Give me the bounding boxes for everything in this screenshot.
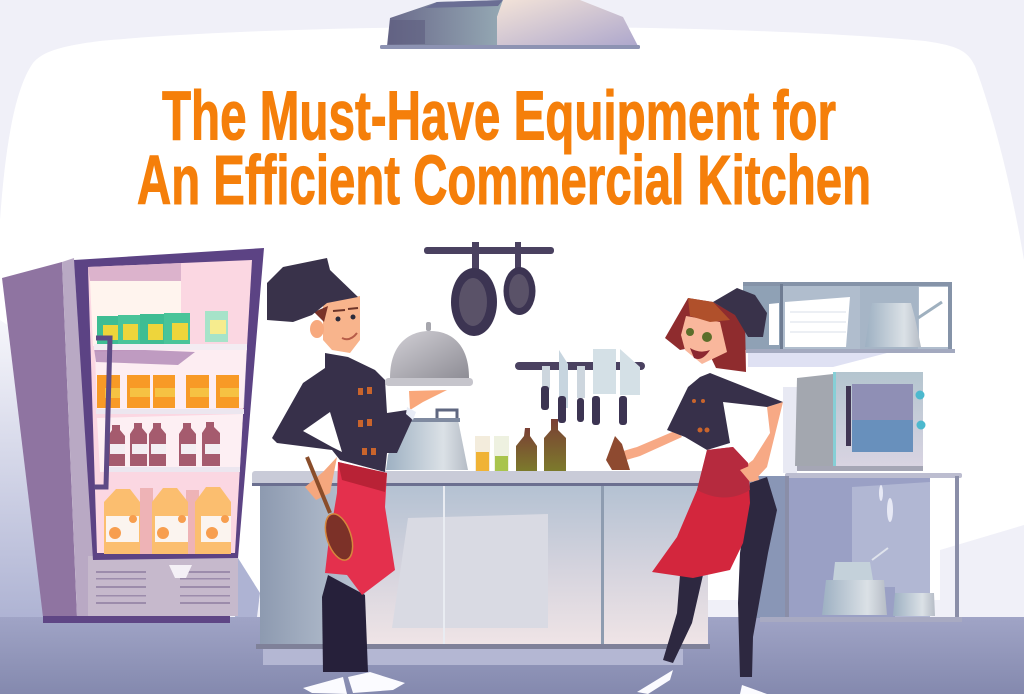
pot on shelf — [865, 303, 921, 347]
woman back leg — [738, 477, 777, 677]
pepper grinder — [606, 436, 630, 470]
woman torso — [667, 373, 783, 450]
fridge body base — [88, 556, 238, 616]
shelf 1 cans — [97, 311, 228, 347]
fridge door frame — [74, 248, 264, 560]
pot on counter — [386, 410, 468, 470]
woman shoes — [637, 670, 673, 694]
pots under table — [833, 562, 873, 580]
microwave oven — [783, 372, 926, 473]
woman front leg — [663, 575, 703, 663]
pans rack — [424, 242, 554, 336]
wedge shadow right of fridge — [235, 558, 260, 617]
woman face — [681, 316, 727, 364]
fridge interior — [88, 260, 252, 553]
side table — [745, 473, 962, 622]
woman hair — [665, 298, 746, 372]
fridge side panel — [2, 262, 77, 617]
woman hat — [713, 288, 767, 337]
chef legs — [322, 575, 368, 672]
knives rack — [515, 349, 645, 425]
chef cuff — [406, 407, 416, 420]
extractor hood — [380, 0, 640, 49]
fridge — [2, 248, 264, 623]
chef shoes — [303, 677, 347, 694]
male chef — [267, 258, 447, 694]
chef torso and arms — [272, 353, 412, 472]
lower wall shading — [0, 320, 50, 620]
shelf 4 juice jugs — [104, 487, 231, 554]
woman apron — [652, 447, 750, 578]
stack of plates — [769, 297, 850, 347]
cloche on tray — [385, 322, 473, 386]
shelf 2 jars — [97, 375, 239, 408]
title — [137, 76, 871, 219]
woman left arm — [620, 430, 682, 461]
female chef — [606, 288, 783, 694]
chef buttons — [358, 387, 376, 455]
floor — [0, 617, 1024, 694]
chef head — [323, 296, 360, 353]
chef spoon hand — [305, 457, 337, 500]
chef hat — [267, 258, 358, 322]
counter — [252, 471, 710, 665]
chef apron — [325, 462, 395, 595]
wall shelf — [743, 282, 955, 367]
woman hand on hip — [740, 463, 759, 482]
chef hand with tray — [409, 390, 447, 410]
shelf 3 bottles — [108, 422, 220, 466]
woman right arm — [740, 402, 783, 482]
spice jars and bottles — [475, 419, 566, 471]
fridge handle — [94, 338, 110, 487]
